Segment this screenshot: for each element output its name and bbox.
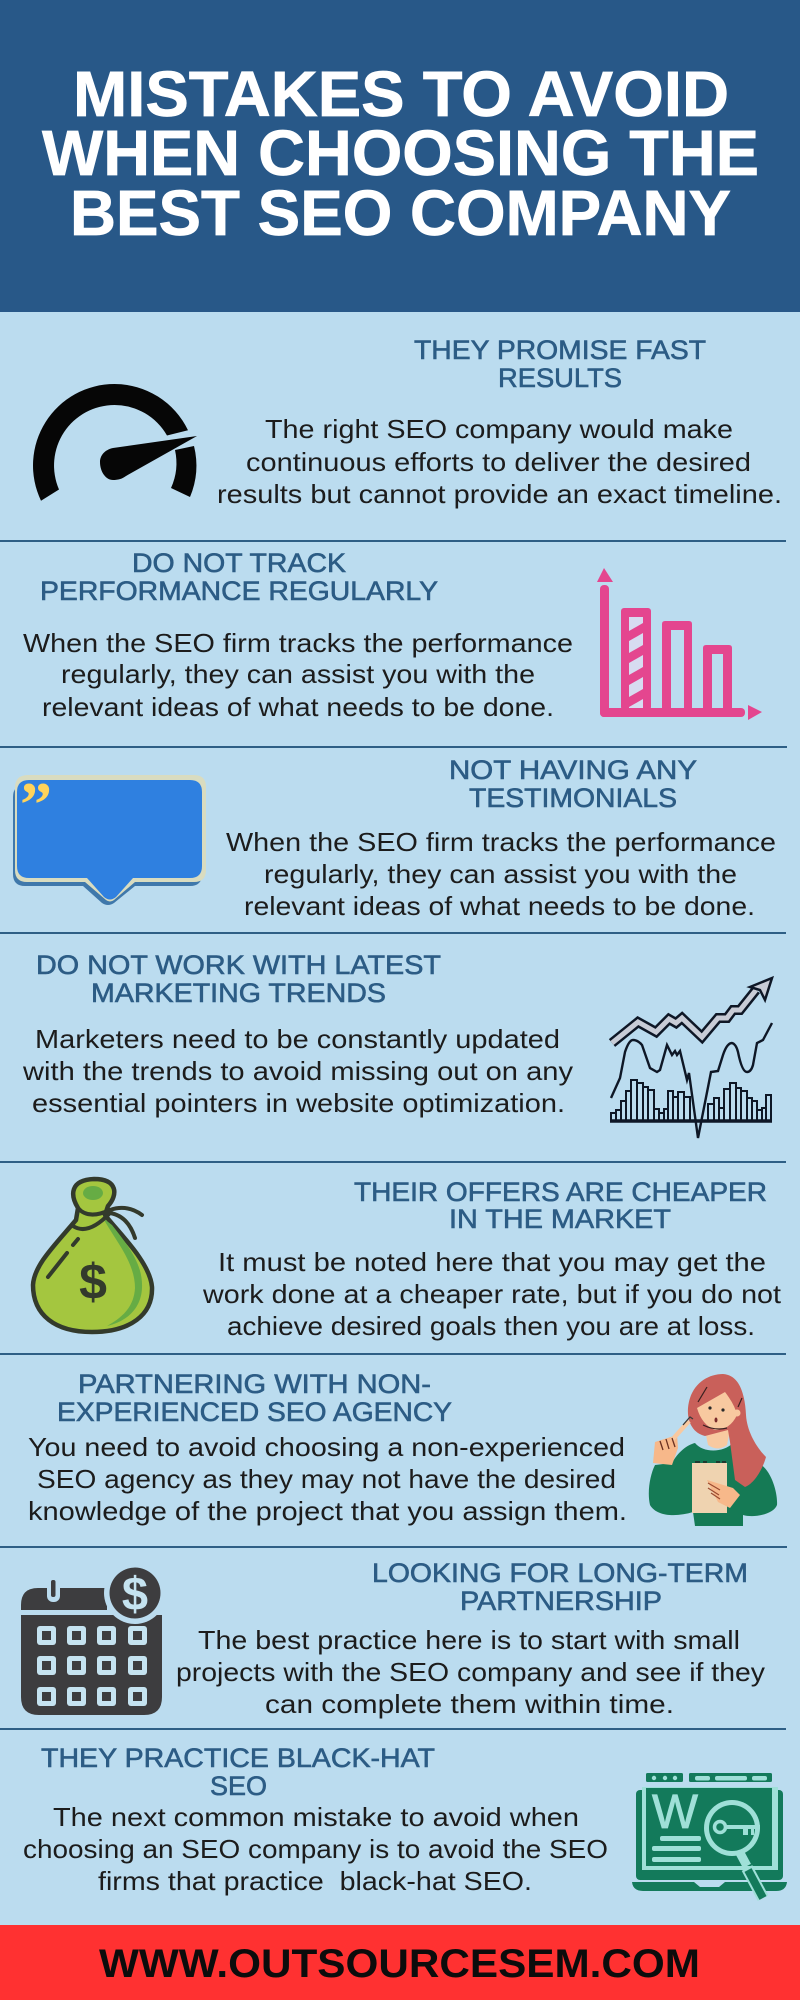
body text (176, 1625, 765, 1719)
body text: choosing an SEO company is to avoid the SEO (23, 1834, 608, 1864)
body text: The right SEO company would make (265, 414, 733, 444)
heading: DO NOT WORK WITH LATEST (36, 950, 441, 980)
icon: pink bar chart (597, 568, 762, 720)
body text: work done at a cheaper rate, but if you do not (202, 1279, 782, 1309)
heading: EXPERIENCED SEO AGENCY (57, 1397, 452, 1427)
body text: achieve desired goals then you are at loss. (227, 1311, 755, 1341)
body text: When the SEO firm tracks the performance (23, 628, 573, 658)
panel: do not track performance regularly (23, 548, 762, 722)
body text: regularly, they can assist you with the (61, 659, 535, 689)
title (42, 58, 759, 249)
body text (202, 1247, 782, 1341)
panel: partnering with non-experienced seo agency (28, 1369, 777, 1526)
icon: speech bubble with quote mark (13, 769, 206, 905)
heading: THEIR OFFERS ARE CHEAPER (354, 1177, 767, 1207)
heading: NOT HAVING ANY (449, 755, 697, 785)
title banner (0, 0, 800, 312)
body text: Marketers need to be constantly updated (35, 1024, 560, 1054)
body text: You need to avoid choosing a non-experienced (28, 1432, 625, 1462)
heading (354, 1177, 767, 1234)
heading (449, 755, 697, 813)
title: WHEN CHOOSING THE (42, 117, 759, 189)
panel: looking for long-term partnership (21, 1558, 765, 1719)
panel: they promise fast results (33, 335, 782, 509)
heading: PERFORMANCE REGULARLY (40, 576, 438, 606)
body text: The next common mistake to avoid when (53, 1802, 579, 1832)
body text: regularly, they can assist you with the (264, 859, 737, 889)
heading: IN THE MARKET (449, 1204, 671, 1234)
heading: SEO (210, 1771, 267, 1801)
body text (23, 1802, 608, 1896)
body text: The best practice here is to start with small (198, 1625, 740, 1655)
icon: browser window with magnifier and key (632, 1773, 787, 1898)
body text: results but cannot provide an exact timeline. (217, 479, 782, 509)
website url: WWW.OUTSOURCESEM.COM (99, 1942, 700, 1986)
footer banner (0, 1925, 800, 2000)
icon: calendar with dollar coin (21, 1562, 166, 1715)
heading: MARKETING TRENDS (91, 978, 386, 1008)
heading: THEY PROMISE FAST (414, 335, 706, 365)
title: MISTAKES TO AVOID (73, 58, 729, 130)
icon: money bag: $ (79, 1254, 107, 1310)
title: BEST SEO COMPANY (70, 177, 731, 249)
icon: calendar with dollar coin: $ (122, 1567, 148, 1620)
icon: browser window with magnifier and key: W (652, 1786, 699, 1839)
body text: relevant ideas of what needs to be done. (42, 692, 554, 722)
icon: money bag (33, 1179, 152, 1332)
panel: their offers are cheaper in the market (33, 1177, 782, 1341)
icon: speech bubble with quote mark: ” (20, 769, 52, 840)
heading (414, 335, 706, 393)
heading (57, 1369, 452, 1427)
heading: LOOKING FOR LONG-TERM (372, 1558, 748, 1588)
heading: DO NOT TRACK (132, 548, 346, 578)
body text: continuous efforts to deliver the desired (246, 447, 751, 477)
body text: with the trends to avoid missing out on any (22, 1056, 573, 1086)
body text: firms that practice black-hat SEO. (98, 1866, 532, 1896)
heading: RESULTS (498, 363, 622, 393)
heading: PARTNERSHIP (460, 1586, 662, 1616)
body text: projects with the SEO company and see if they (176, 1657, 765, 1687)
panel: do not work with latest marketing trends (22, 950, 772, 1138)
body text: relevant ideas of what needs to be done. (244, 891, 755, 921)
body text: When the SEO firm tracks the performance (226, 827, 776, 857)
heading: THEY PRACTICE BLACK-HAT (41, 1743, 435, 1773)
panel: not having any testimonials (13, 755, 776, 921)
body text (217, 414, 782, 509)
body text: It must be noted here that you may get the (218, 1247, 766, 1277)
body text: can complete them within time. (265, 1689, 674, 1719)
heading (40, 548, 438, 606)
body text (28, 1432, 627, 1526)
body text (226, 827, 776, 921)
body text: essential pointers in website optimization. (32, 1088, 565, 1118)
heading (41, 1743, 435, 1801)
icon: stock market trend chart (610, 978, 772, 1138)
body text: SEO agency as they may not have the desired (37, 1464, 616, 1494)
panel: they practice black-hat seo (23, 1743, 787, 1898)
body text: knowledge of the project that you assign them. (28, 1496, 627, 1526)
body text (22, 1024, 573, 1118)
heading: TESTIMONIALS (469, 783, 677, 813)
heading: PARTNERING WITH NON- (78, 1369, 431, 1399)
icon: speedometer gauge (33, 384, 197, 501)
heading (36, 950, 441, 1008)
icon: woman with notepad and pencil (649, 1374, 777, 1526)
heading (372, 1558, 748, 1616)
body text (23, 628, 573, 722)
